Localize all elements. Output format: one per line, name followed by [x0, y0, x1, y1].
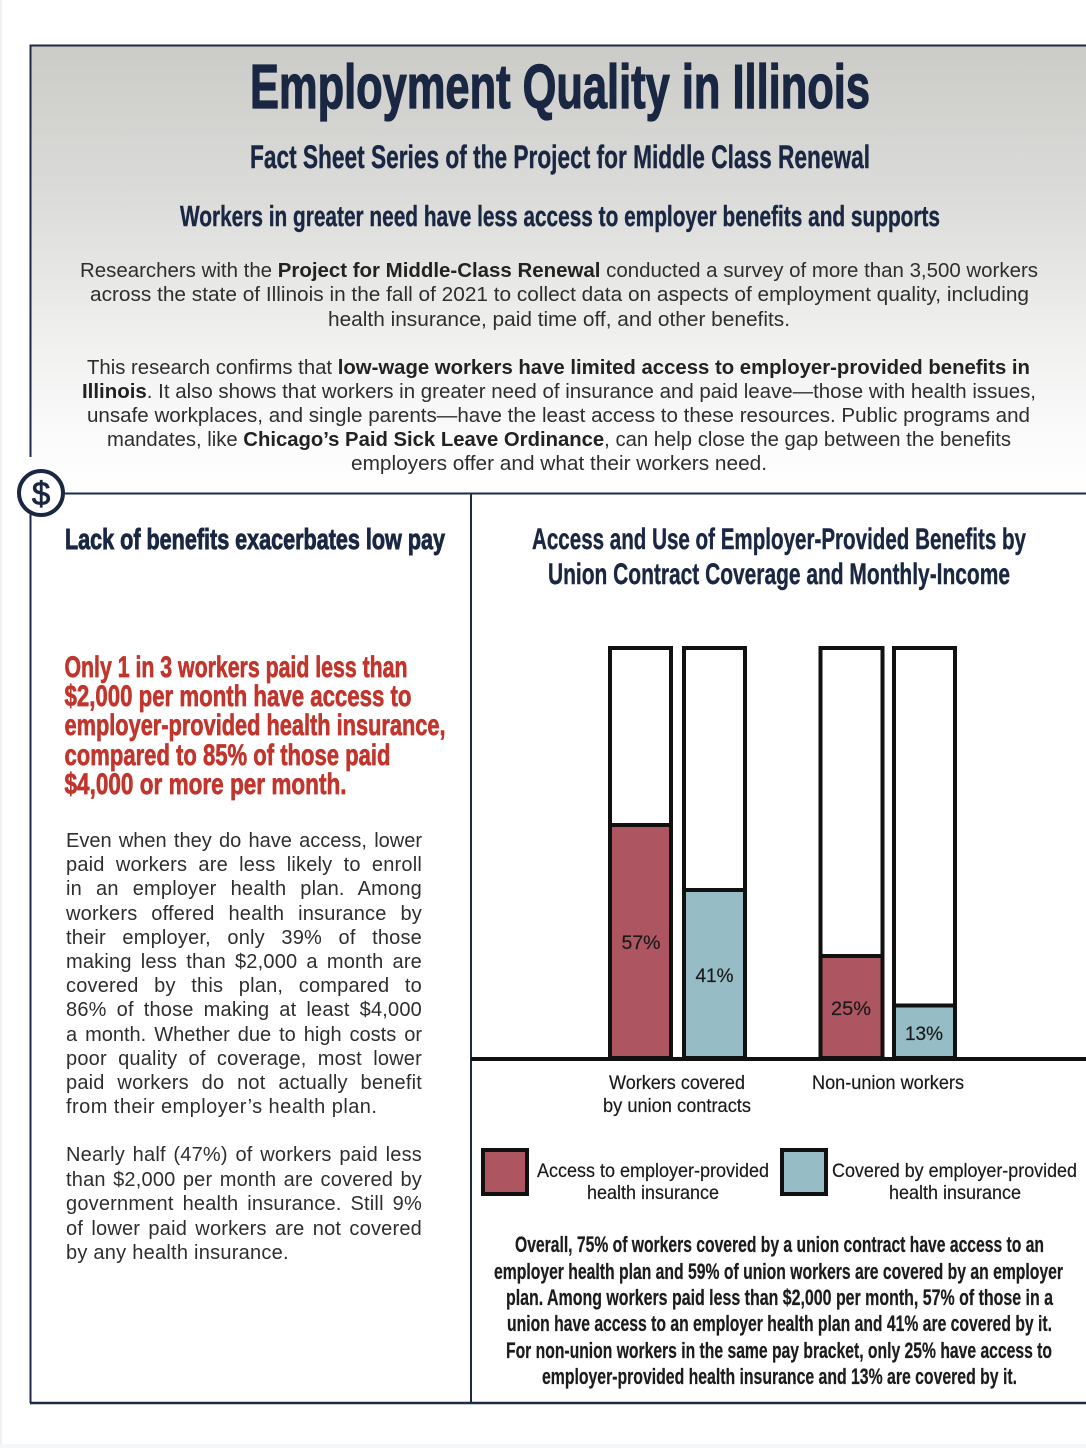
text block: enrollment: their employer, only 39% of those [66, 927, 422, 949]
panel: right column [471, 523, 1086, 1389]
text block: research findings [82, 357, 1036, 475]
panel: left column [64, 524, 446, 801]
text block: research findings: Illinois. It also shows that workers in greater need of insurance and paid leave—those with health issues, [82, 381, 1036, 403]
text block: enrollment: workers offered health insurance by [66, 903, 422, 925]
text block: enrollment: poor quality of coverage, most lower [66, 1048, 422, 1070]
text block: survey intro: Researchers with the Project for Middle-Class Renewal conducted a survey of more than 3,500 workers [80, 260, 1038, 282]
legend item: access [483, 1150, 769, 1204]
callout: red statistic: compared to 85% of those paid [64, 739, 390, 772]
bar: union access 57% [610, 648, 671, 1058]
heading: chart title [532, 523, 1026, 591]
bar: non-union covered 13%: 13% [905, 1023, 943, 1045]
text block: overall summary [494, 1232, 1063, 1389]
text block: research findings: mandates, like Chicago’s Paid Sick Leave Ordinance, can help close the gap between the benefits [107, 429, 1011, 451]
legend item: covered [782, 1150, 1077, 1204]
bar: non-union covered 13% [894, 648, 955, 1058]
axis label: union workers: by union contracts [603, 1095, 751, 1117]
legend [483, 1150, 1077, 1204]
text block: enrollment: paid workers do not actually benefit [66, 1072, 422, 1094]
text block: enrollment: Even when they do have access, lower [66, 830, 422, 852]
axis label: union workers [603, 1072, 751, 1117]
callout: red statistic [64, 651, 446, 801]
legend item: access: Access to employer-provided [537, 1160, 769, 1182]
text block: enrollment: 86% of those making at least $4,000 [66, 999, 422, 1021]
bar chart [471, 648, 1086, 1117]
panel: header [30, 45, 1086, 493]
text block: government insurance: government health insurance. Still 9% [66, 1193, 422, 1215]
text block: research findings: This research confirms that low-wage workers have limited access to employer-provided benefits in [87, 357, 1030, 379]
text block: enrollment: a month. Whether due to high costs or [66, 1024, 422, 1046]
text block: government insurance [66, 1144, 422, 1264]
text block: survey intro: across the state of Illinois in the fall of 2021 to collect data on aspects of employment quality, including [90, 284, 1029, 306]
bar: union covered 41%: 41% [696, 965, 734, 987]
callout: red statistic: $4,000 or more per month. [64, 768, 346, 801]
callout: red statistic: $2,000 per month have access to [64, 680, 412, 713]
text block: enrollment: from their employer’s health plan. [66, 1096, 377, 1118]
text block: government insurance: by any health insurance. [66, 1242, 289, 1264]
callout: red statistic: Only 1 in 3 workers paid less than [64, 651, 408, 684]
text block: enrollment: in an employer health plan. Among [66, 878, 422, 900]
text block: survey intro: health insurance, paid time off, and other benefits. [328, 309, 790, 331]
text block: enrollment [66, 830, 422, 1118]
heading: lack of benefits: Lack of benefits exacerbates low pay [65, 524, 445, 556]
text block: enrollment: covered by this plan, compared to [66, 975, 422, 997]
text block: government insurance: than $2,000 per month are covered by [66, 1168, 422, 1190]
bar: non-union access 25%: 25% [831, 998, 871, 1020]
callout: red statistic: employer-provided health insurance, [64, 709, 446, 742]
icon: dollar sign: $ [32, 475, 50, 512]
text block: enrollment: paid workers are less likely to enroll [66, 854, 422, 876]
bar: union access 57%: 57% [622, 932, 660, 954]
icon: dollar sign [19, 471, 63, 515]
text block: research findings: employers offer and what their workers need. [351, 453, 767, 475]
legend item: access: health insurance [587, 1182, 719, 1204]
text block: research findings: unsafe workplaces, and single parents—have the least access to these resources. Public programs and [87, 405, 1030, 427]
bar: non-union access 25% [820, 648, 882, 1058]
text block: government insurance: of lower paid workers are not covered [66, 1218, 422, 1240]
axis label: non-union workers: Non-union workers [812, 1072, 964, 1094]
bar: union covered 41% [684, 648, 745, 1058]
text block: survey intro [80, 260, 1038, 331]
legend item: covered: health insurance [889, 1182, 1021, 1204]
text block: government insurance: Nearly half (47%) of workers paid less [66, 1144, 422, 1166]
text block: enrollment: making less than $2,000 a month are [66, 951, 422, 973]
axis label: union workers: Workers covered [609, 1072, 745, 1094]
